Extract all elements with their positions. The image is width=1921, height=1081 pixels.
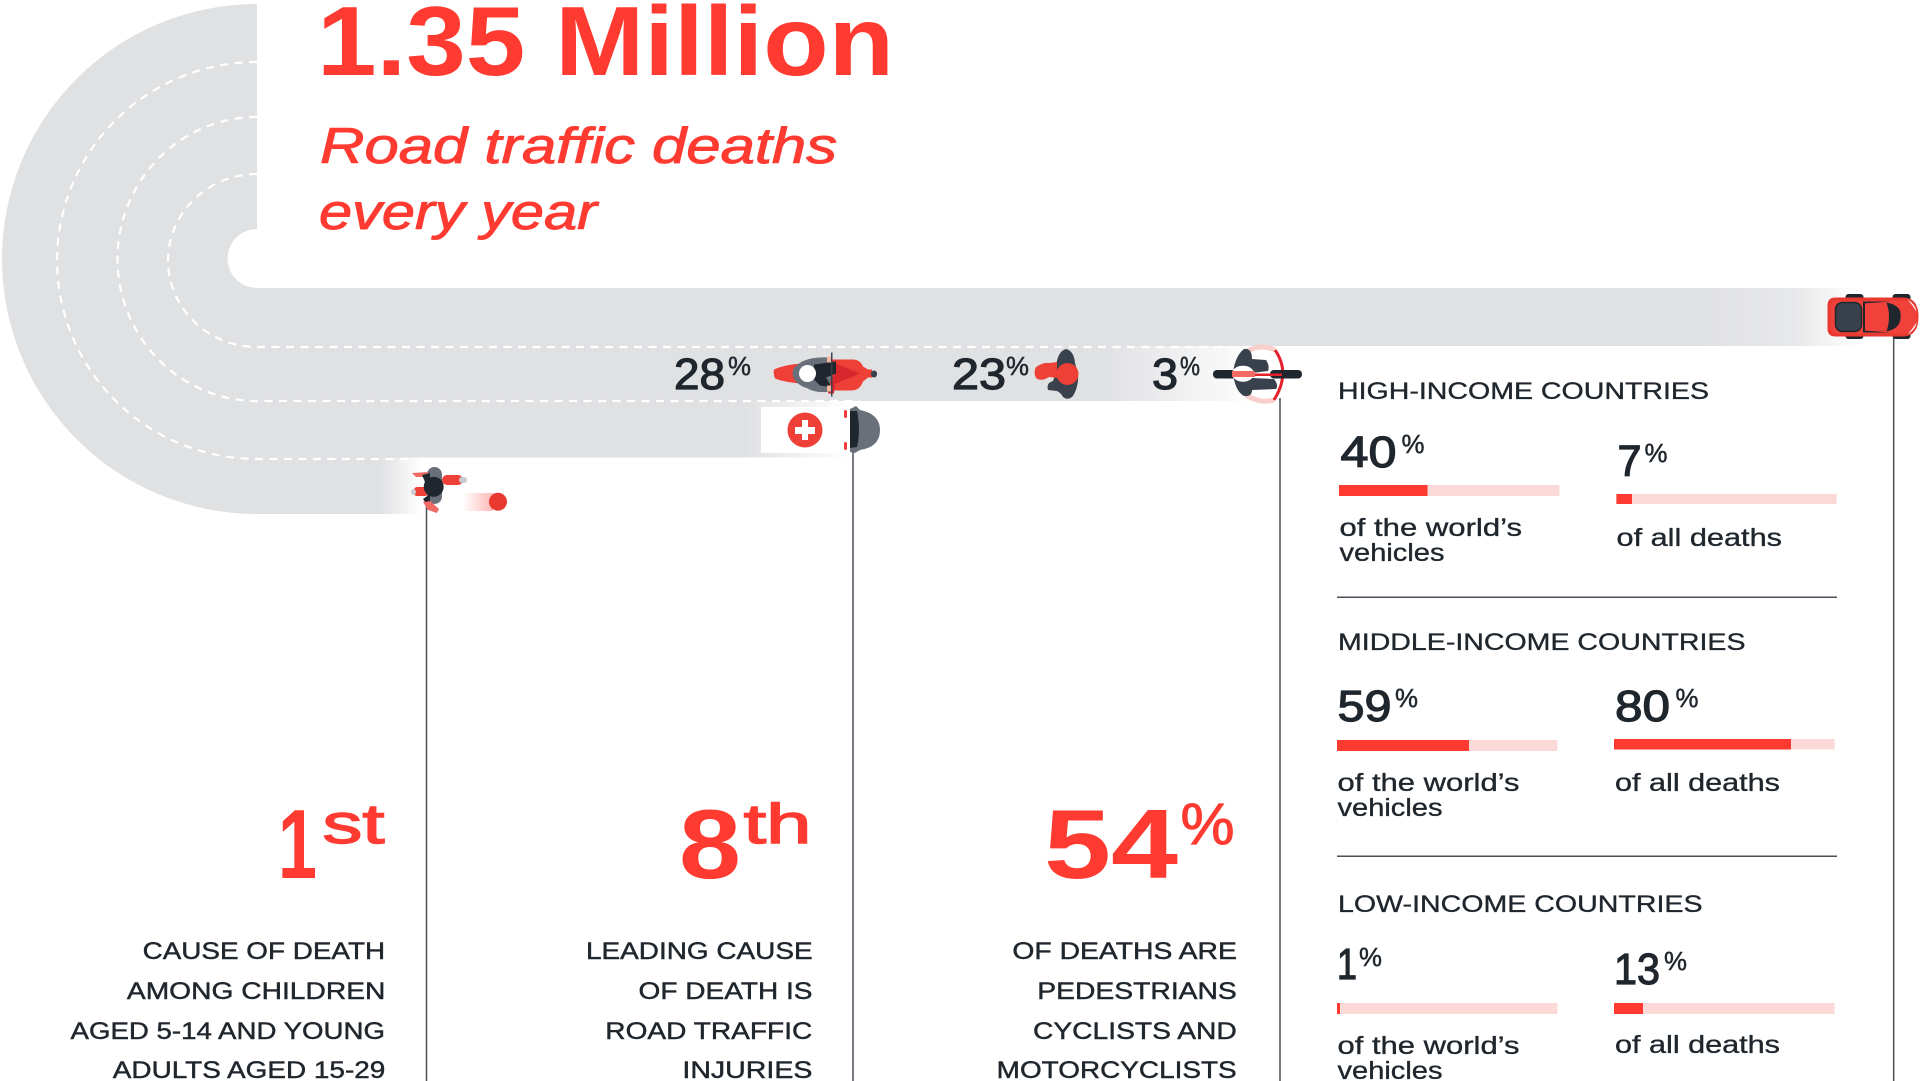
figure: 1% of vehicles: 1 bbox=[1337, 940, 1357, 989]
figure: 7% of deaths: % bbox=[1644, 438, 1668, 468]
figure: 1% of vehicles: of the world’s bbox=[1338, 1032, 1520, 1060]
stat: 1st bbox=[278, 789, 385, 899]
panel: middle-income countries bbox=[1337, 629, 1835, 822]
figure: 40% of vehicles: vehicles bbox=[1340, 539, 1444, 567]
figure: 7% of deaths bbox=[1616, 437, 1837, 552]
caption: 8th: ROAD TRAFFIC bbox=[605, 1018, 812, 1045]
icon: ambulance bbox=[761, 406, 880, 453]
percentage: motorcyclists 28%: 28 bbox=[674, 350, 725, 399]
percentage: motorcyclists 28%: % bbox=[728, 351, 751, 381]
percentage: pedestrians 23%: % bbox=[1006, 351, 1029, 381]
road bbox=[2, 4, 1867, 514]
percentage: cyclists 3% bbox=[1152, 350, 1200, 399]
icon: pedestrian bbox=[1034, 349, 1078, 399]
figure: 13% of deaths: of all deaths bbox=[1615, 1031, 1780, 1059]
divider bbox=[1337, 596, 1837, 598]
caption: 1st bbox=[70, 938, 385, 1081]
figure: 59% of vehicles: 59 bbox=[1338, 682, 1392, 731]
caption: 54% bbox=[997, 938, 1237, 1081]
subtitle: Road traffic deaths bbox=[320, 118, 837, 174]
stat: 8th bbox=[679, 789, 812, 899]
caption: 54%: CYCLISTS AND bbox=[1033, 1018, 1237, 1045]
heading: low-income: LOW-INCOME COUNTRIES bbox=[1338, 891, 1702, 918]
figure: 59% of vehicles: vehicles bbox=[1338, 794, 1442, 822]
panel: high-income countries bbox=[1338, 378, 1837, 567]
caption: 8th: OF DEATH IS bbox=[638, 978, 812, 1005]
subtitle bbox=[319, 118, 837, 240]
caption: 1st: AGED 5-14 AND YOUNG bbox=[70, 1018, 385, 1045]
heading: high-income: HIGH-INCOME COUNTRIES bbox=[1338, 378, 1709, 405]
figure: 59% of vehicles bbox=[1337, 682, 1557, 822]
figure: 59% of vehicles: % bbox=[1395, 683, 1418, 713]
percentage: cyclists 3%: % bbox=[1180, 351, 1200, 381]
icon: cyclist bbox=[1213, 347, 1302, 401]
figure: 13% of deaths bbox=[1614, 945, 1835, 1059]
figure: 40% of vehicles bbox=[1339, 428, 1559, 567]
stat: 54%: % bbox=[1180, 792, 1234, 857]
heading: middle-income: MIDDLE-INCOME COUNTRIES bbox=[1338, 629, 1746, 656]
panel: low-income countries bbox=[1337, 891, 1835, 1081]
figure: 13% of deaths: % bbox=[1664, 946, 1687, 976]
icon: car bbox=[1828, 294, 1918, 339]
figure: 80% of deaths bbox=[1614, 682, 1835, 797]
figure: 40% of vehicles: 40 bbox=[1340, 428, 1396, 477]
figure: 40% of vehicles: % bbox=[1402, 429, 1424, 459]
figure: 80% of deaths: 80 bbox=[1615, 682, 1670, 731]
icon: child with ball bbox=[411, 467, 507, 513]
figure: 13% of deaths: 13 bbox=[1614, 945, 1660, 994]
percentage: motorcyclists 28% bbox=[674, 350, 751, 399]
stat: 1st: 1 bbox=[278, 789, 317, 899]
figure: 80% of deaths: of all deaths bbox=[1615, 769, 1780, 797]
stat: 8th: th bbox=[744, 792, 812, 855]
icon: motorcycle bbox=[774, 352, 877, 396]
caption: 8th bbox=[586, 938, 813, 1081]
caption: 54%: PEDESTRIANS bbox=[1037, 978, 1237, 1005]
figure: 59% of vehicles: of the world’s bbox=[1338, 769, 1520, 797]
figure: 40% of vehicles: of the world’s bbox=[1340, 514, 1522, 542]
figure: 7% of deaths: of all deaths bbox=[1616, 524, 1782, 552]
percentage: pedestrians 23% bbox=[952, 350, 1029, 399]
figure: 1% of vehicles bbox=[1337, 940, 1557, 1081]
stat: 54%: 54 bbox=[1044, 789, 1178, 899]
vertical leader lines bbox=[426, 336, 1894, 1081]
caption: 1st: CAUSE OF DEATH bbox=[143, 938, 385, 965]
figure: 1% of vehicles: % bbox=[1359, 942, 1382, 972]
percentage: pedestrians 23%: 23 bbox=[952, 350, 1006, 399]
stat: 1st: st bbox=[322, 792, 385, 855]
subtitle: every year bbox=[319, 184, 600, 240]
caption: 8th: LEADING CAUSE bbox=[586, 938, 813, 965]
divider bbox=[1337, 856, 1837, 857]
percentage: cyclists 3%: 3 bbox=[1152, 350, 1178, 399]
figure: 7% of deaths: 7 bbox=[1618, 437, 1642, 486]
figure: 80% of deaths: % bbox=[1676, 683, 1698, 713]
caption: 1st: AMONG CHILDREN bbox=[127, 978, 385, 1005]
stat: 54% bbox=[1044, 789, 1234, 899]
stat: 8th: 8 bbox=[679, 789, 741, 899]
caption: 54%: OF DEATHS ARE bbox=[1012, 938, 1237, 965]
